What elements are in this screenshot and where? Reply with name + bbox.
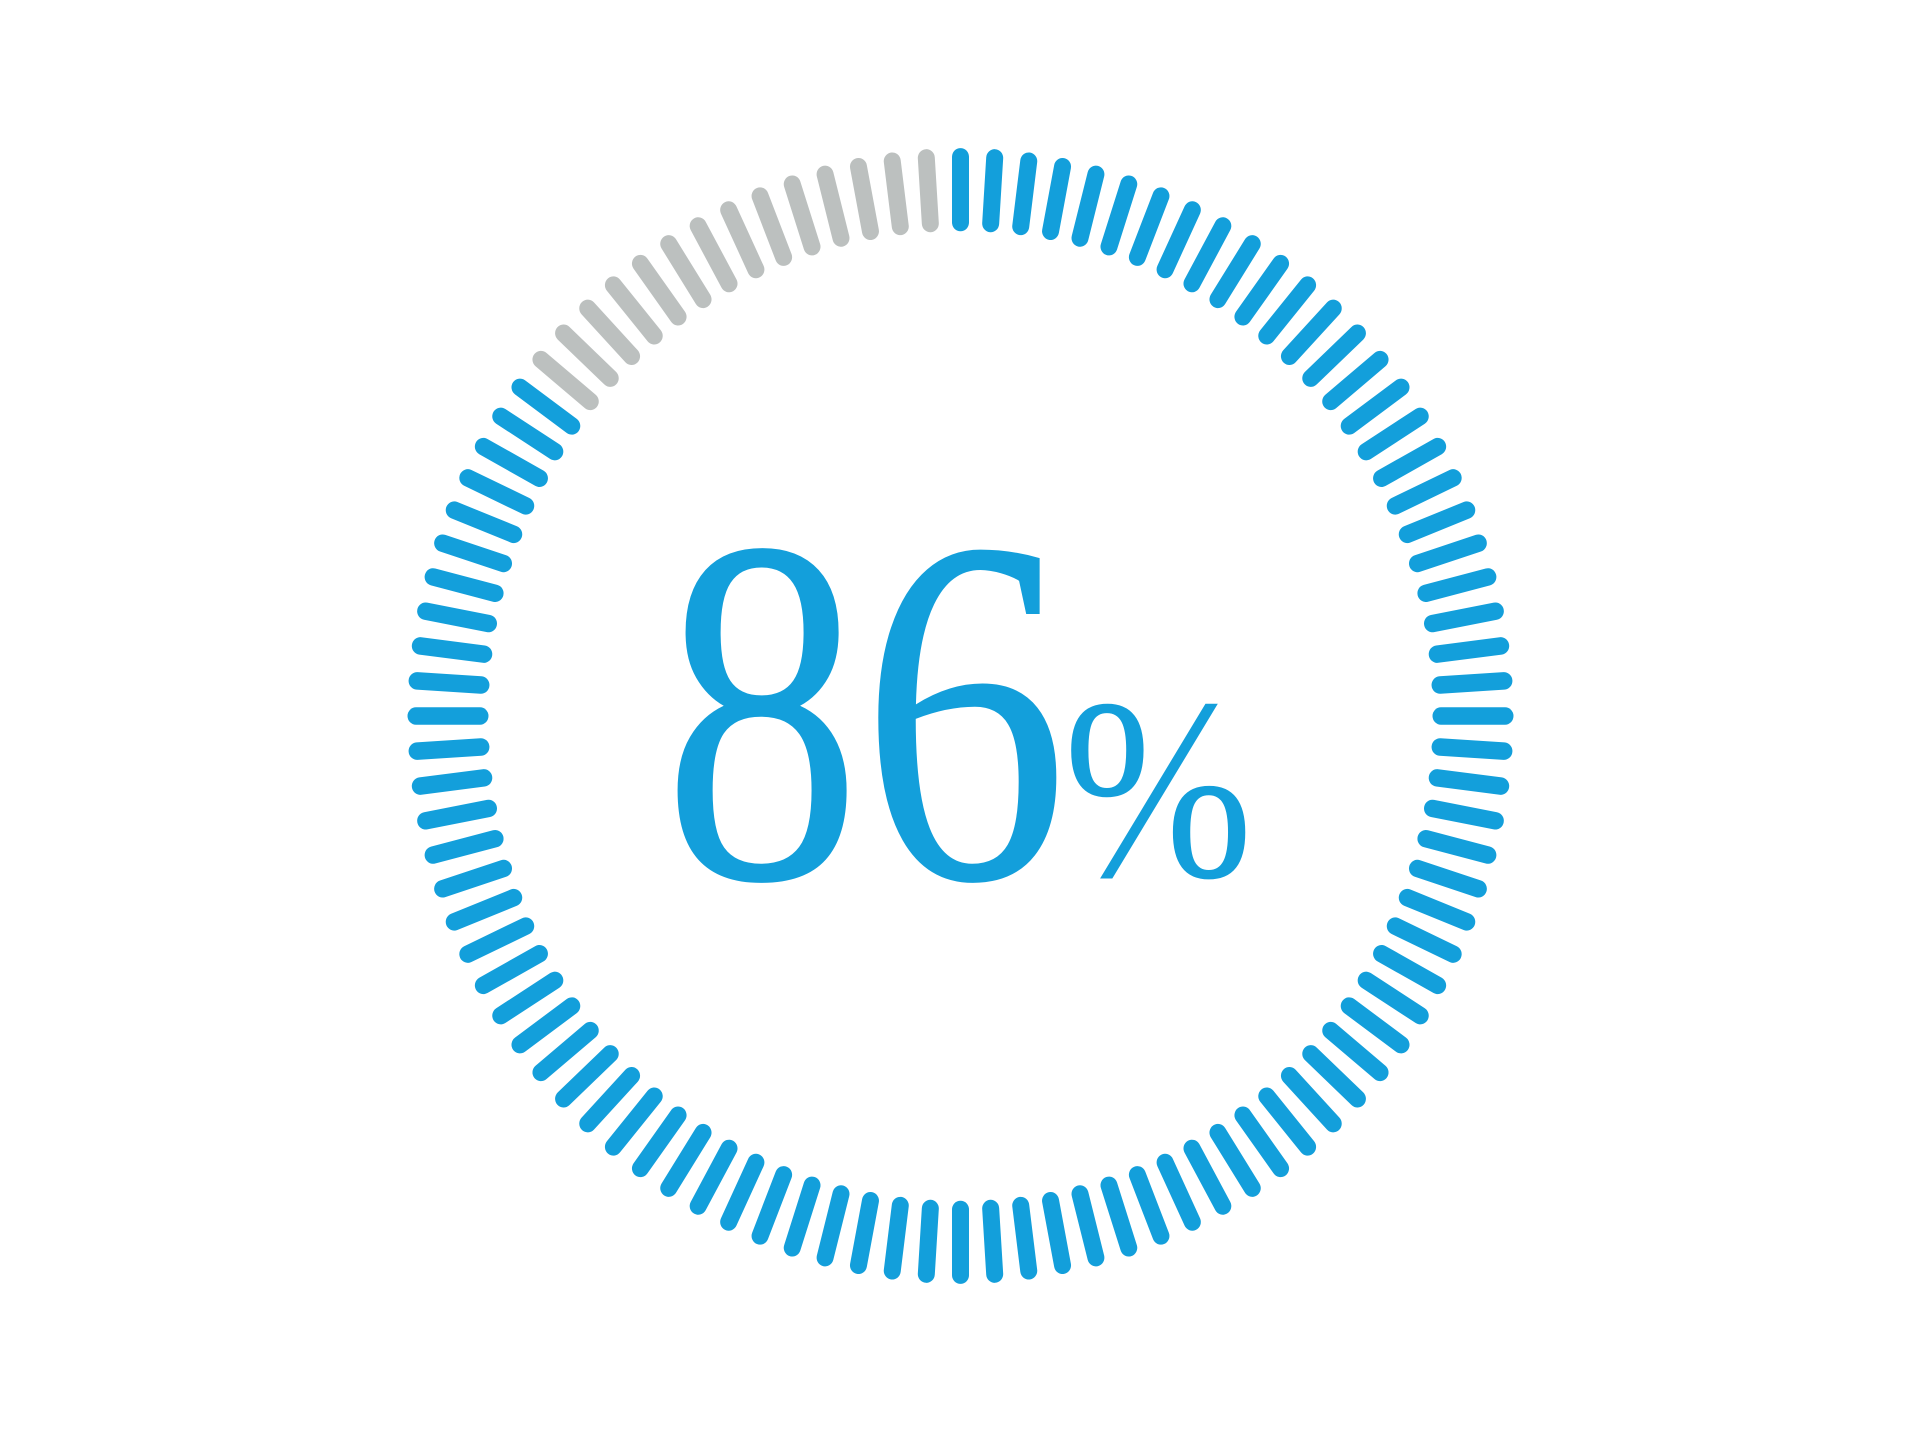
remaining ticks: 14 gray — [529, 109, 954, 469]
percent sign: % — [1063, 646, 1253, 932]
digit 8: 8 — [662, 437, 862, 986]
percentage value: 86% — [662, 437, 1253, 986]
progress ring — [385, 109, 1536, 1307]
filled ticks: 86 blue — [385, 148, 1536, 1307]
digit 6: 6 — [860, 437, 1069, 986]
